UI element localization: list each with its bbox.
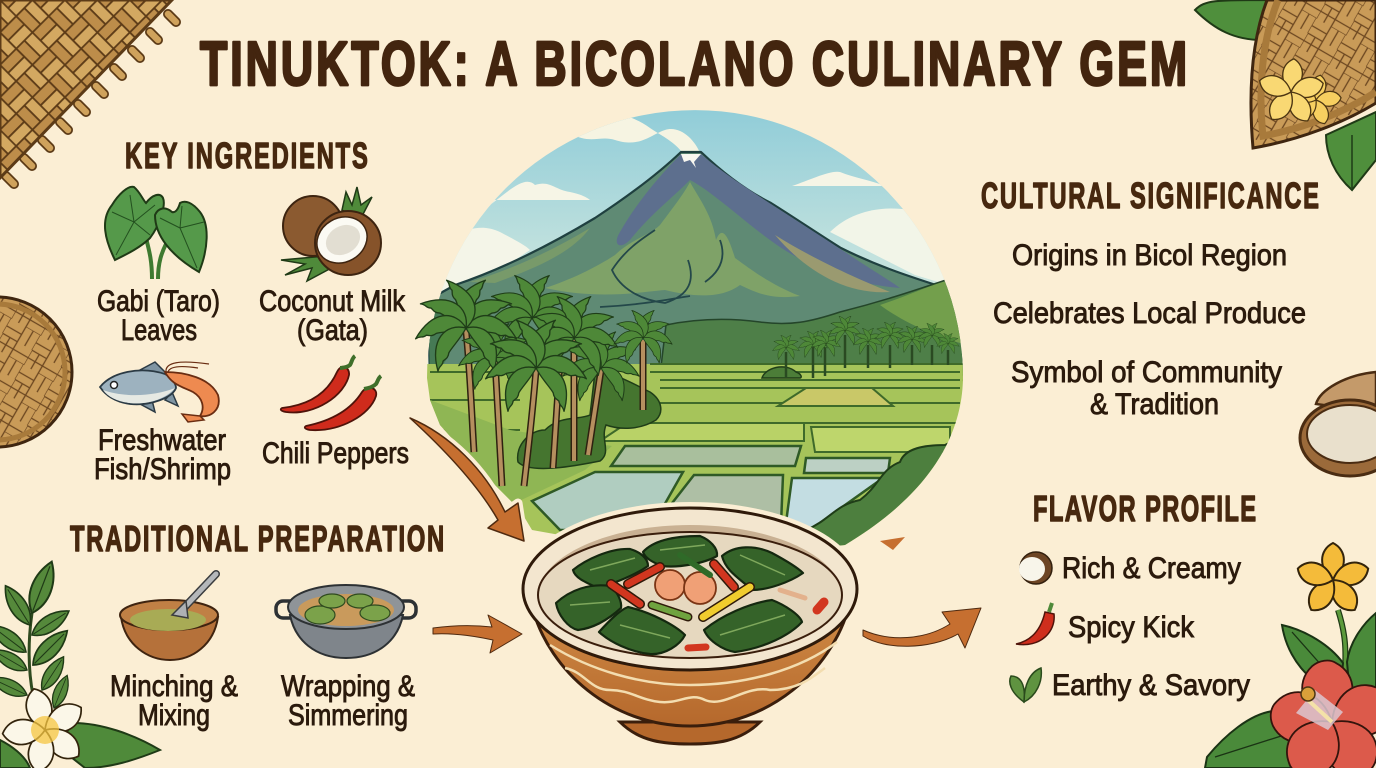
central landscape illustration — [420, 105, 975, 570]
icon: leaf flavor — [1010, 668, 1041, 702]
bushes — [518, 372, 661, 468]
mountain blue upper slopes — [617, 154, 900, 288]
flower small — [1290, 74, 1342, 126]
heading: traditional preparation: TRADITIONAL PREPARATION — [70, 519, 444, 559]
title: TINUKTOK: A BICOLANO CULINARY GEM — [200, 30, 1187, 99]
label: chili peppers: Chili Peppers — [262, 437, 409, 470]
icon: taro leaves — [105, 187, 207, 279]
label: leaves: Leaves — [121, 314, 197, 347]
mountain green slopes — [545, 182, 800, 297]
label: freshwater: Freshwater — [98, 424, 226, 457]
arrow: ingredients to bowl — [410, 418, 524, 541]
decoration: bottom left leaves and plumeria — [0, 558, 160, 768]
grass under palms — [430, 400, 612, 510]
label: simmering: Simmering — [288, 699, 408, 732]
icon: chili flavor — [1016, 603, 1054, 645]
text: earthy savory: Earthy & Savory — [1052, 669, 1250, 702]
label: gabi: Gabi (Taro) — [97, 285, 220, 318]
arrow: preparation to bowl — [433, 615, 522, 653]
heading: flavor profile: FLAVOR PROFILE — [1033, 489, 1256, 529]
label: gata: (Gata) — [297, 314, 368, 347]
text: origins: Origins in Bicol Region — [1012, 239, 1287, 272]
icon: coconut flavor — [1019, 552, 1052, 584]
text: symbol: Symbol of Community — [1011, 356, 1282, 389]
distant palms — [773, 315, 959, 378]
bowl of tinuktok — [517, 502, 905, 744]
leaf and basket top right — [1195, 0, 1376, 190]
mountain — [428, 152, 970, 380]
icon: chili peppers — [281, 356, 381, 430]
round basket left — [0, 297, 72, 447]
icon: cooking pot — [276, 585, 416, 658]
icon: mortar and pestle — [120, 574, 218, 660]
heading: cultural significance: CULTURAL SIGNIFICANCE — [981, 176, 1319, 216]
decoration: bottom right flowers — [1205, 543, 1376, 768]
label: wrapping: Wrapping & — [281, 670, 415, 703]
label: mixing: Mixing — [138, 699, 210, 732]
text: tradition: & Tradition — [1090, 388, 1219, 421]
label: fish shrimp: Fish/Shrimp — [94, 453, 231, 486]
far hills — [660, 280, 975, 375]
paddies — [778, 388, 893, 406]
rice fields — [427, 364, 963, 546]
flower large — [1256, 58, 1326, 126]
icon: fish and shrimp — [100, 362, 219, 422]
right foreground bush — [810, 442, 948, 546]
label: coconut milk: Coconut Milk — [259, 285, 406, 318]
woven mat top left — [0, 0, 176, 184]
arrow: bowl to flavor — [863, 608, 981, 648]
icon: coconut — [281, 187, 381, 281]
shrimp and pepper garnish — [611, 555, 824, 648]
text: spicy kick: Spicy Kick — [1068, 611, 1195, 644]
palm trees — [416, 272, 672, 486]
label: minching: Minching & — [110, 670, 238, 703]
heading: key ingredients: KEY INGREDIENTS — [125, 136, 368, 176]
coconut bowl right edge — [1300, 372, 1376, 476]
text: rich creamy: Rich & Creamy — [1062, 552, 1241, 585]
tinuktok wraps — [556, 536, 803, 654]
text: celebrates: Celebrates Local Produce — [993, 297, 1306, 330]
